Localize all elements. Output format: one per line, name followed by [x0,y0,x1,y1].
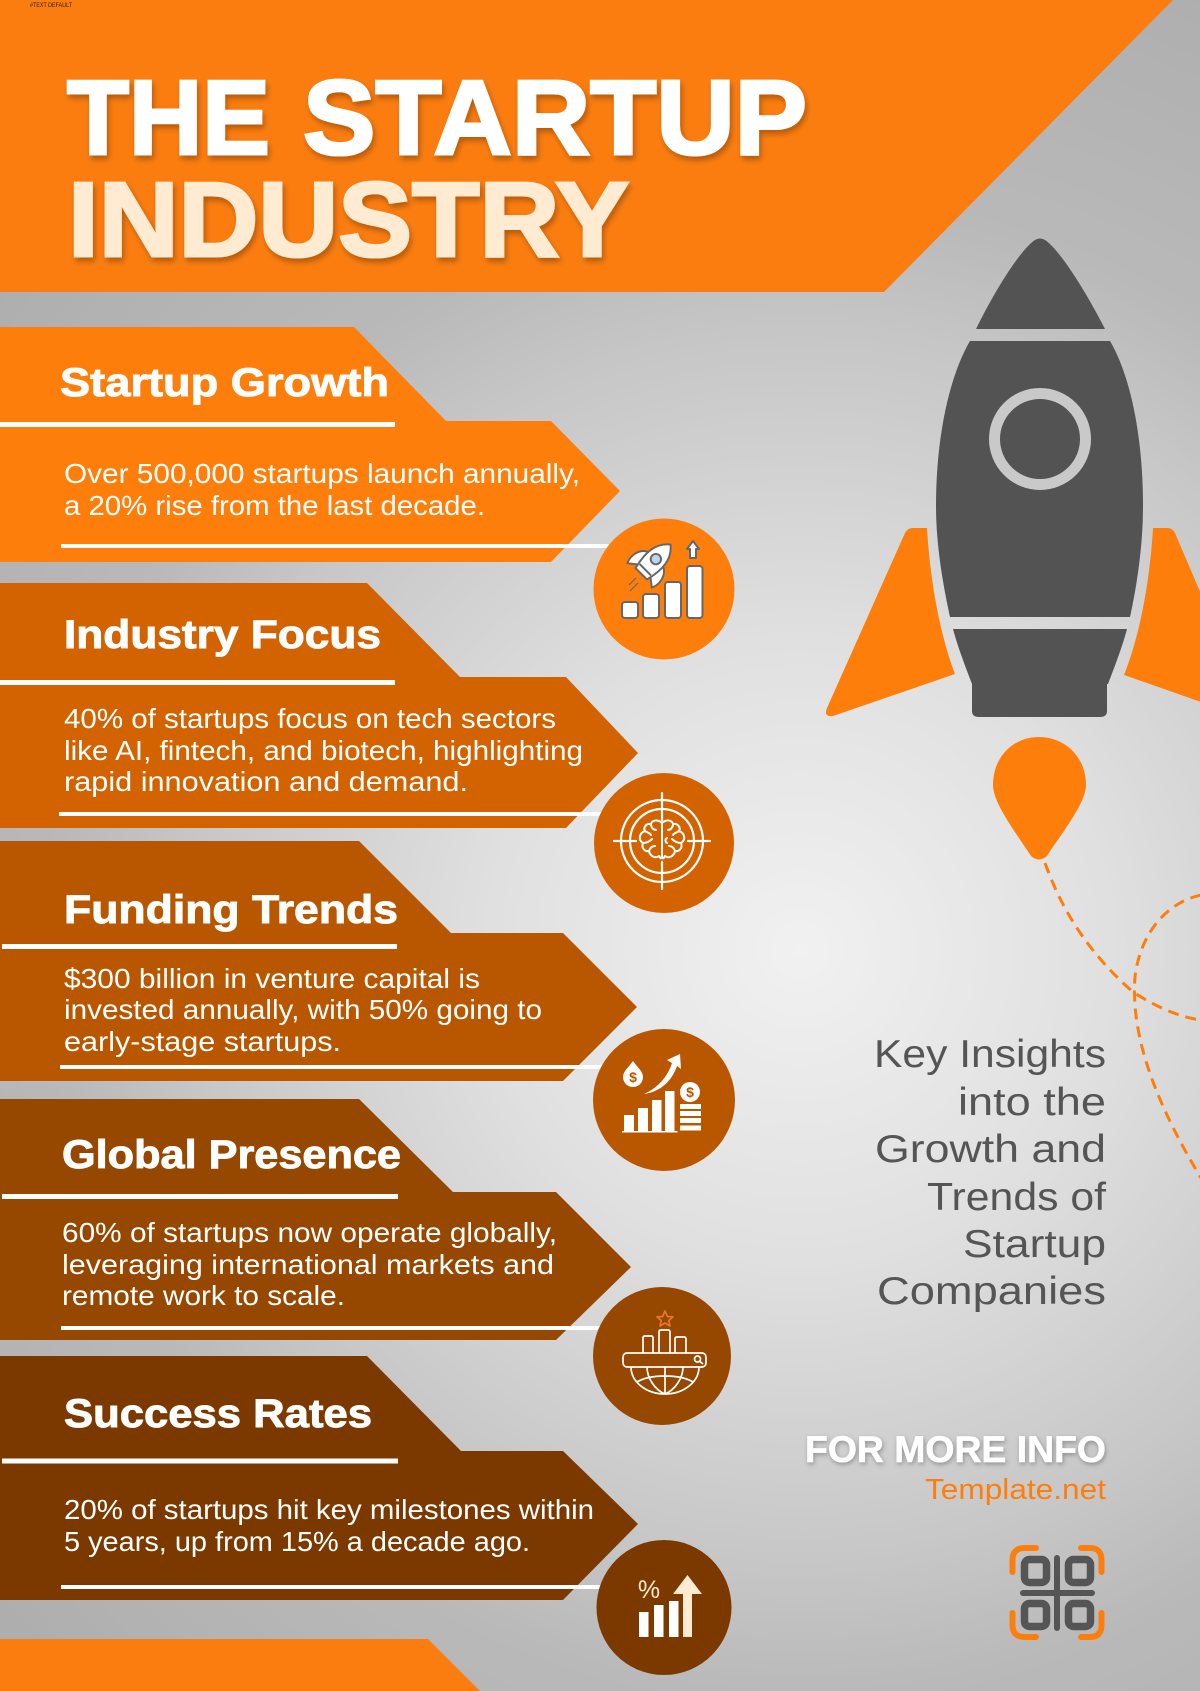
title [67,59,807,279]
title: THE [67,59,270,177]
body text: Over 500,000 startups launch annually, [64,458,580,489]
rocket body [936,238,1143,717]
header banner [0,0,1173,292]
body text: 60% of startups now operate globally, [62,1217,557,1248]
key insights text: Startup [963,1223,1106,1266]
key insights text: Trends of [927,1176,1106,1219]
key insights text: Companies [877,1270,1106,1313]
for more info: FOR MORE INFO [805,1429,1106,1470]
bottom banner [0,1639,480,1691]
icon: funding chart: $ [686,1084,694,1100]
panel shape [0,583,638,828]
icon: brain target [594,773,734,913]
heading: Funding Trends [64,888,398,932]
panel: industry focus [0,583,734,913]
panel: funding trends [0,841,735,1171]
heading: Global Presence [62,1133,401,1177]
rocket window [994,394,1086,484]
dashed flight path [1045,863,1200,1178]
panel shape [0,327,620,562]
key insights text: into the [958,1081,1106,1124]
body text: rapid innovation and demand. [64,766,468,797]
panel: startup growth [0,327,734,660]
icon: global search chart [593,1287,731,1425]
icon: QR code [1012,1548,1102,1637]
body text [64,703,583,797]
panel shape [0,1356,638,1600]
icon: funding chart: $ [629,1069,637,1085]
panel shape [0,841,637,1081]
body text: remote work to scale. [62,1280,345,1311]
icon: funding chart [593,1029,735,1171]
icon: percent growth [596,1540,732,1675]
body text: 40% of startups focus on tech sectors [64,703,556,734]
body text: 5 years, up from 15% a decade ago. [64,1526,530,1557]
title: STARTUP [303,59,807,177]
key insights text: Growth and [875,1128,1106,1171]
title: INDUSTRY [68,161,629,279]
heading: Industry Focus [64,613,381,657]
key insights text [874,1033,1106,1313]
body text: like AI, fintech, and biotech, highlighting [64,735,583,766]
body text: invested annually, with 50% going to [64,994,542,1025]
panel: global presence [0,1099,731,1425]
body text: leveraging international markets and [62,1249,554,1280]
icon: percent growth: % [638,1576,660,1604]
heading: Startup Growth [60,361,389,405]
body text [62,1217,557,1311]
icon: rocket growth chart [594,518,734,660]
body text [64,1494,594,1557]
body text: early-stage startups. [64,1026,341,1057]
body text: 20% of startups hit key milestones within [64,1494,594,1525]
body text: a 20% rise from the last decade. [64,490,485,521]
website link: Template.net [925,1474,1106,1506]
key insights text: Key Insights [874,1033,1106,1076]
rocket flame [993,737,1086,860]
body text: $300 billion in venture capital is [64,963,480,994]
body text [64,963,542,1057]
rocket fins [826,528,1200,716]
template tag text: #TEXT DEFAULT [30,3,72,9]
panel: success rates [0,1356,732,1675]
body text [64,458,580,521]
heading: Success Rates [64,1392,372,1436]
rocket illustration [826,238,1200,860]
panel shape [0,1099,631,1340]
